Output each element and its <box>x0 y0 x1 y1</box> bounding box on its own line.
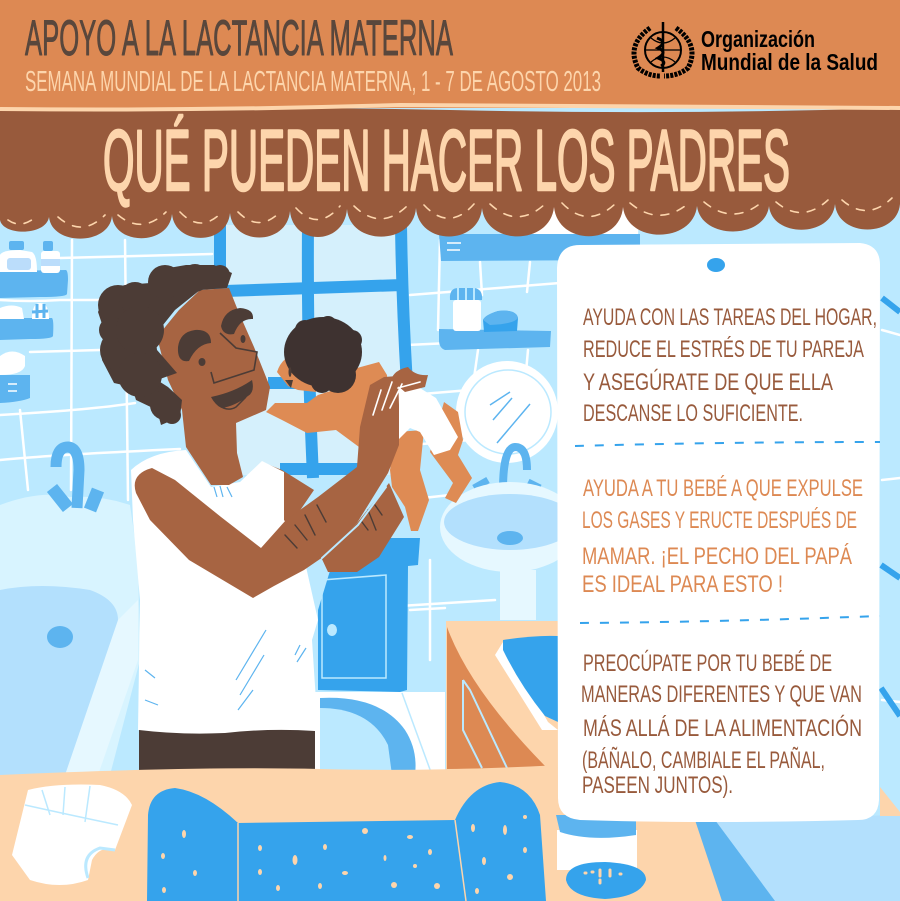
cream header edge <box>0 105 900 110</box>
window <box>218 225 407 478</box>
tip 2: ES IDEAL PARA ESTO ! <box>582 571 783 598</box>
foreground counter <box>0 765 724 901</box>
sink faucet <box>474 447 540 490</box>
sink <box>440 482 580 620</box>
peach cabinet <box>446 621 566 776</box>
tip 2 <box>582 475 863 598</box>
WHO wordmark <box>701 26 878 75</box>
baby <box>266 316 472 531</box>
right shelf with bottle and soap <box>439 288 551 350</box>
bath faucet <box>52 447 98 510</box>
shirt <box>131 450 318 735</box>
dad hair <box>98 264 232 425</box>
far forearm <box>321 483 404 572</box>
panel: advice card <box>557 243 880 822</box>
wall mirror <box>456 361 558 463</box>
tip 3 <box>581 650 862 799</box>
neck and head <box>98 264 270 485</box>
floor right <box>695 815 900 901</box>
baby face <box>277 352 318 392</box>
header heading: APOYO A LA LACTANCIA MATERNA <box>25 10 453 66</box>
far upper arm <box>262 462 314 530</box>
dad eyes <box>198 335 246 366</box>
jar <box>556 815 637 870</box>
jar lid <box>566 862 646 899</box>
diaper <box>390 378 458 455</box>
right lower peach ledge <box>880 787 900 816</box>
baby other leg <box>430 402 472 503</box>
near arm and hand <box>135 376 399 598</box>
card pin hole <box>707 258 725 272</box>
bathroom wall background <box>0 200 900 901</box>
WHO wordmark: Organización <box>701 26 815 52</box>
cabinet <box>318 538 420 704</box>
blue changing pad <box>147 782 546 901</box>
icon: WHO emblem <box>634 22 692 76</box>
orange header band <box>0 0 900 108</box>
baby leg <box>390 430 429 531</box>
tip 1: DESCANSE LO SUFICIENTE. <box>583 400 803 427</box>
finger highlights and arm hair <box>285 382 420 558</box>
baby mouth and eye <box>285 367 293 388</box>
brown awning with scallops <box>0 108 900 239</box>
toilet <box>315 692 445 775</box>
bathtub <box>0 495 140 775</box>
baby hair <box>284 316 362 393</box>
right edge blue stripes <box>881 298 900 716</box>
dad nose line <box>211 333 257 383</box>
dad eyebrows <box>178 308 253 361</box>
tip 1 <box>583 304 877 427</box>
tip 3: PASEEN JUNTOS). <box>582 772 733 799</box>
awning stitches <box>8 198 892 227</box>
trousers <box>139 730 315 776</box>
far hand <box>391 367 428 392</box>
shirt folds <box>145 486 306 710</box>
folded diaper <box>12 785 132 885</box>
dad mouth <box>211 380 253 409</box>
top shelf <box>439 200 640 261</box>
left shelves with toiletries <box>0 241 68 403</box>
baby body and arm <box>266 362 392 447</box>
